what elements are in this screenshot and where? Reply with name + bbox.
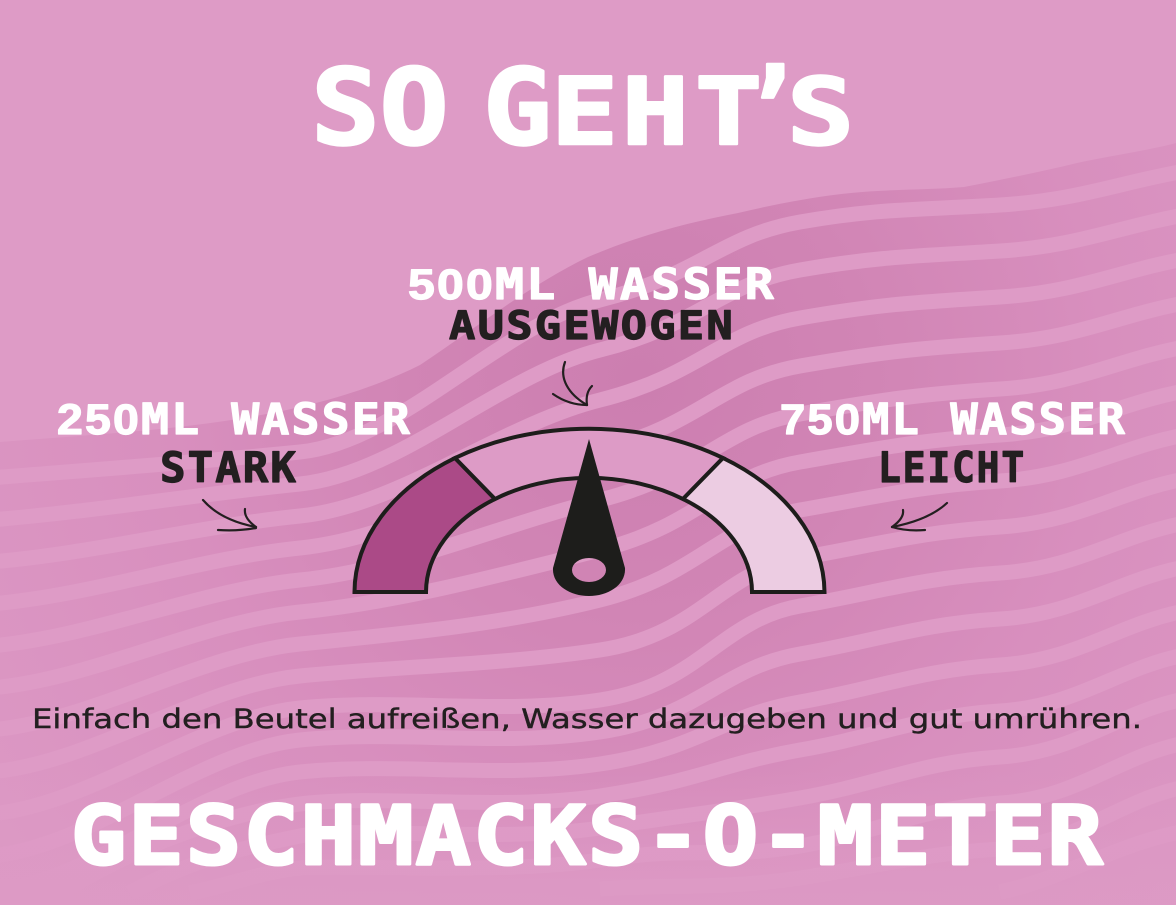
label: 750ml Wasser: 750ML WASSER	[780, 395, 1127, 445]
gauge segment: balanced	[455, 429, 723, 499]
title: G	[483, 46, 552, 169]
title: ’	[740, 47, 803, 169]
label: Stark: STARK	[160, 443, 298, 492]
arrow: right	[892, 503, 947, 530]
label: 500ml Wasser: 500ML WASSER	[408, 260, 776, 310]
bottom heading: GESCHMACKS-O-METER	[71, 790, 1105, 884]
label: 250ml Wasser: 250ML WASSER	[57, 395, 412, 445]
title: S	[787, 59, 854, 167]
arrow: left	[203, 500, 256, 530]
title: EHT	[551, 59, 762, 167]
title: SO	[311, 46, 449, 169]
gauge segment: strong	[354, 458, 495, 592]
instruction text: Einfach den Beutel aufreißen, Wasser dazugeben und gut umrühren.	[32, 704, 1142, 735]
gauge segment: light	[683, 458, 824, 592]
gauge	[354, 429, 824, 596]
title	[311, 46, 854, 169]
arrow: top	[553, 362, 592, 405]
label: Leicht: LEICHT	[878, 443, 1026, 492]
gauge needle	[553, 439, 625, 596]
label: Ausgewogen: AUSGEWOGEN	[449, 304, 735, 349]
